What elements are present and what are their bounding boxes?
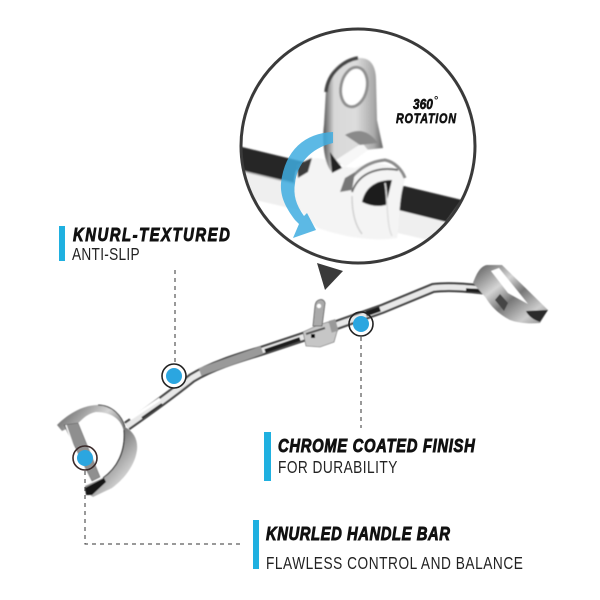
rotation arrow [281,132,333,238]
callout: chrome coated finish: FOR DURABILITY [278,458,398,478]
label: 360 rotation: 360 [413,96,433,112]
callout: knurled handle bar [253,520,523,574]
lens ring [241,29,475,263]
callout: knurled handle bar: KNURLED HANDLE BAR [266,523,450,544]
marker: knurled handle [73,446,97,470]
swivel collar [294,158,405,239]
bar shaft [127,287,488,426]
callout: knurled handle bar: FLAWLESS CONTROL AND BALANCE [266,554,523,574]
mounting lug [323,58,383,172]
callout: chrome coated finish [264,432,476,481]
right handle [473,265,548,323]
marker: chrome finish [349,312,373,336]
label: 360 rotation [396,95,457,126]
callout: chrome coated finish: CHROME COATED FINISH [278,435,476,456]
pointer triangle [317,263,343,290]
callout: knurl-textured: ANTI-SLIP [72,245,140,265]
callout: knurl-textured: KNURL-TEXTURED [73,224,230,245]
inset photo [238,58,462,240]
swivel on bar [303,300,338,347]
marker: knurl-textured [162,364,186,388]
lat bar product [57,265,548,497]
leader lines [85,270,361,544]
left handle [57,405,137,497]
callout: knurl-textured [59,224,230,265]
inset: swivel detail [238,29,475,263]
label: 360 rotation: ROTATION [396,111,457,126]
label: 360 rotation: ° [434,95,438,107]
